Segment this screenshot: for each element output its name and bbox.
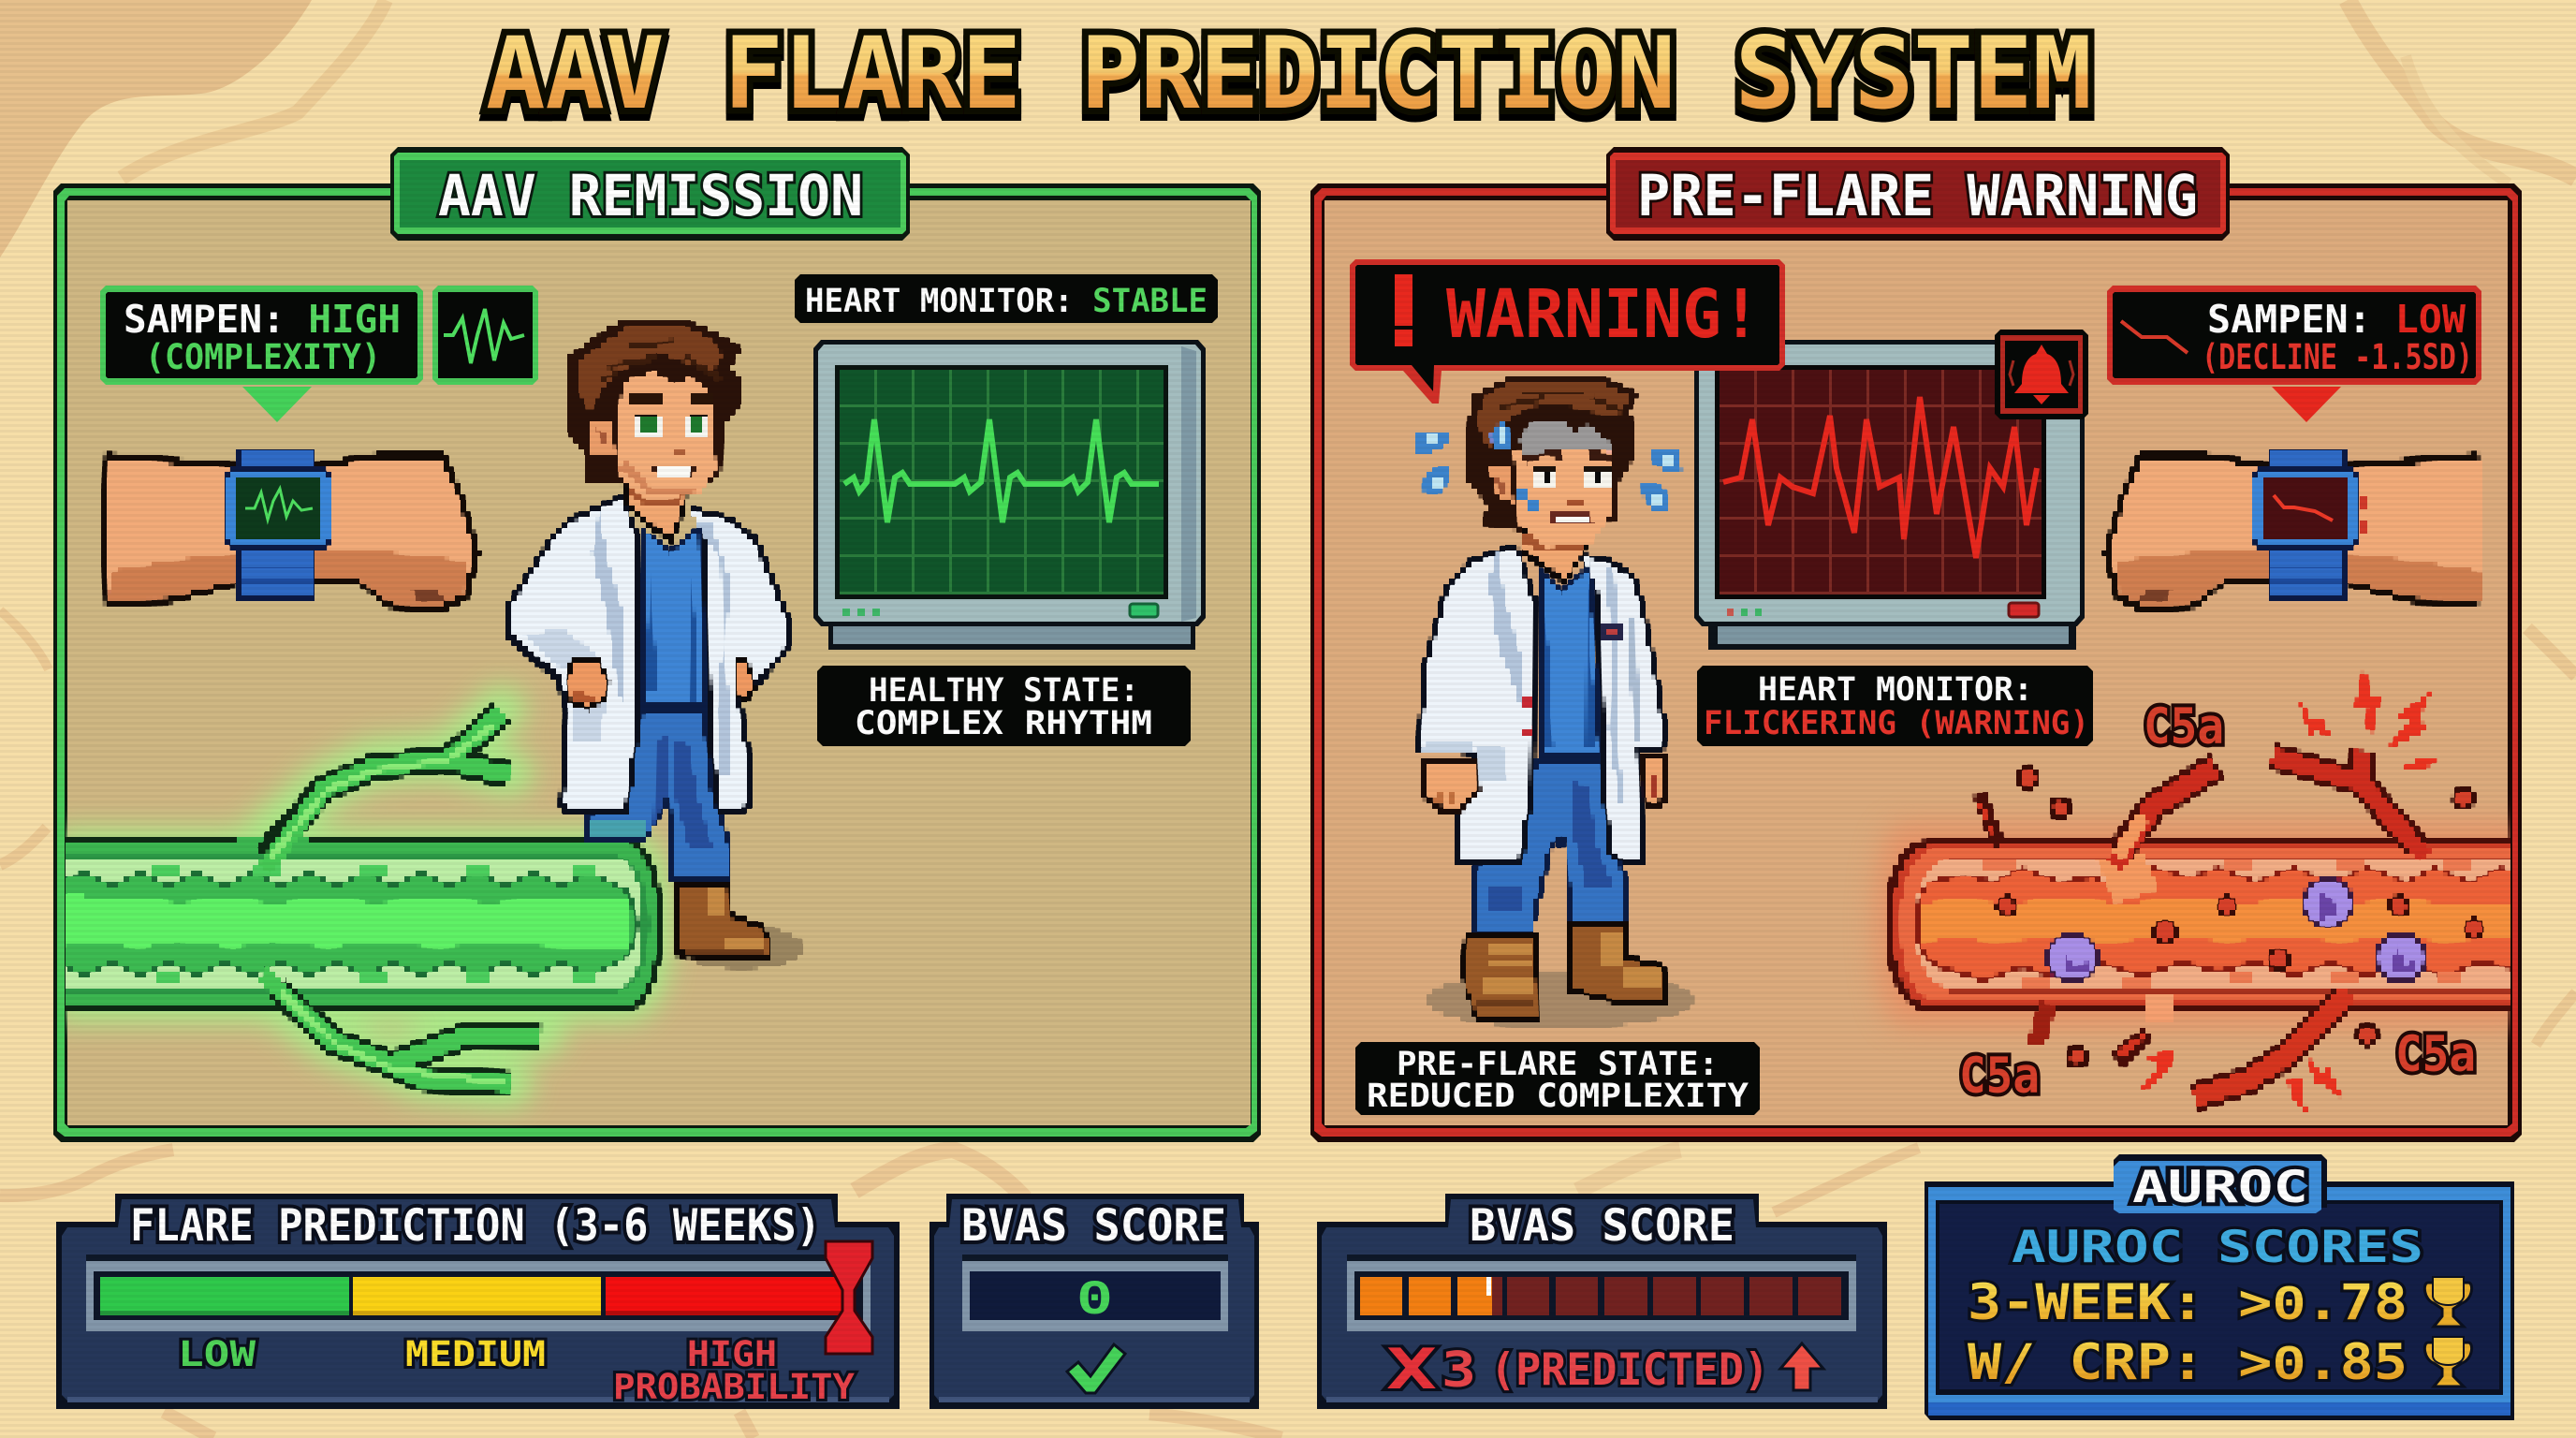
monitor: stable rhythm (813, 340, 1206, 650)
panel: BVAS predicted: BVAS SCORE (1470, 1200, 1734, 1252)
callout: warning speech bubble (1350, 259, 1785, 404)
icon: trophy (2424, 1337, 2472, 1387)
callout: SampEn high (100, 286, 423, 422)
panel: AUROC scores: AUROC SCORES (2012, 1222, 2423, 1273)
panel: AAV remission (53, 147, 1261, 1142)
icon: trophy (2424, 1277, 2472, 1327)
label: healthy state: COMPLEX RHYTHM (855, 705, 1152, 742)
score display (962, 1255, 1228, 1331)
callout: SampEn high: SAMPEN: HIGH (124, 297, 401, 342)
monitor: flickering rhythm (1694, 340, 2085, 650)
label: heart monitor flickering (1697, 666, 2093, 746)
callout: SampEn low: SAMPEN: LOW (2207, 297, 2466, 342)
number: predicted 3: 3 (1442, 1343, 1476, 1399)
segmented score bar (1347, 1255, 1856, 1331)
panel: AUROC scores: 3-WEEK: > 0.78 (1968, 1274, 2408, 1334)
panel: AUROC scores: W/ CRP: > 0.85 (1968, 1334, 2408, 1394)
panel: flare prediction gauge: FLARE PREDICTION (3-6 WEEKS) (130, 1200, 821, 1252)
artery: healthy green vessel (56, 710, 674, 1084)
tab: pre-flare warning: PRE-FLARE WARNING (1637, 163, 2198, 229)
callout: warning speech bubble: WARNING! (1446, 275, 1761, 353)
panel: flare prediction gauge: LOW (178, 1334, 256, 1374)
doctor: happy (504, 318, 803, 969)
label: pre-flare state: REDUCED COMPLEXITY (1367, 1078, 1749, 1115)
title: AAV FLARE PREDICTION SYSTEM (486, 16, 2092, 131)
label: healthy state: HEALTHY STATE: (869, 672, 1139, 710)
panel: BVAS score zero (929, 1194, 1259, 1409)
panel: flare prediction gauge: HIGH (687, 1334, 777, 1374)
panel: flare prediction gauge (56, 1194, 900, 1409)
label: pre-flare state: PRE-FLARE STATE: (1397, 1046, 1719, 1083)
panel: BVAS predicted (1317, 1194, 1887, 1409)
artery: inflamed vessel (1876, 663, 2527, 1116)
label: heart monitor flickering: HEART MONITOR: (1758, 671, 2033, 709)
label: heart monitor flickering: FLICKERING (WARNING) (1704, 705, 2089, 742)
gauge bar (86, 1255, 871, 1331)
callout: SampEn low: (DECLINE -1.5SD) (2202, 337, 2473, 377)
panel: flare prediction gauge: MEDIUM (405, 1334, 546, 1374)
callout: SampEn low (2107, 286, 2481, 422)
panel: flare prediction gauge: PROBABILITY (613, 1367, 856, 1407)
tab: AUROC (2114, 1154, 2327, 1213)
icon: pulse box (432, 286, 538, 385)
icon: up arrow (1780, 1343, 1823, 1390)
wearable: wrist with red watch (2103, 448, 2483, 613)
icon text: X mark: X (1386, 1337, 1437, 1402)
label: heart monitor stable: HEART MONITOR: STABLE (805, 283, 1208, 320)
icon: check mark (1067, 1344, 1125, 1393)
label: C5a top: C5a (2144, 698, 2224, 756)
wearable: wrist with green watch (101, 448, 480, 613)
tab: pre-flare warning (1606, 147, 2230, 241)
tab: AAV remission: AAV REMISSION (438, 163, 863, 229)
label: pre-flare state (1355, 1042, 1760, 1115)
label: healthy state (817, 666, 1191, 746)
tab: AUROC: AUROC (2132, 1162, 2308, 1213)
panel: BVAS score zero: BVAS SCORE (961, 1200, 1226, 1252)
tab: AAV remission (390, 147, 910, 241)
panel: pre-flare warning (1310, 147, 2527, 1142)
gauge marker (826, 1241, 872, 1354)
panel: BVAS predicted: (PREDICTED) (1490, 1344, 1769, 1396)
callout: SampEn high: (COMPLEXITY) (145, 337, 381, 377)
panel: AUROC scores (1925, 1154, 2514, 1420)
label: C5a bottom right: C5a (2395, 1026, 2476, 1083)
score display: 0 (1076, 1273, 1113, 1328)
icon: alarm bell (1995, 330, 2088, 419)
doctor: worried (1416, 377, 1693, 1028)
label: C5a bottom left: C5a (1959, 1048, 2040, 1105)
